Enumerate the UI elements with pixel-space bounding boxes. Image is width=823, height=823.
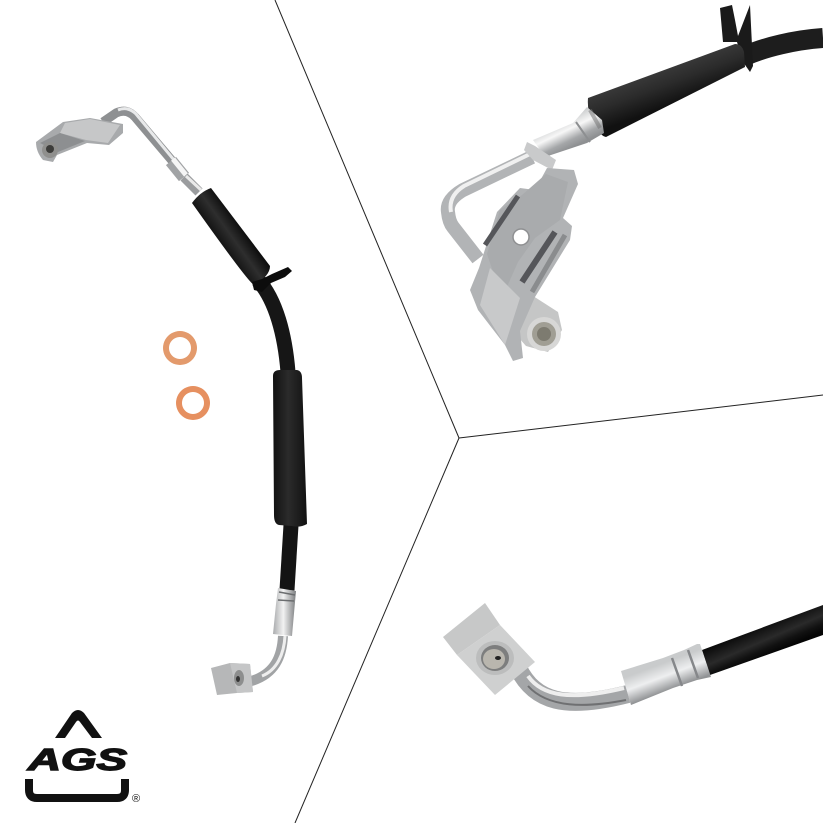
full hose product: [36, 109, 307, 695]
close-up: bottom-right block end: [443, 603, 823, 705]
upper heat sleeve: [192, 188, 270, 285]
divider lines: [275, 0, 823, 823]
close-up: top-right bracket end: [448, 5, 823, 361]
bracket bolt eye: [42, 142, 58, 158]
top metal tube: [103, 109, 174, 163]
bottom ferrule: [273, 588, 296, 636]
curved tube: [518, 668, 628, 705]
bracket hole: [513, 229, 529, 245]
logo wordmark: AGS: [27, 742, 127, 777]
bracket slot right: [522, 232, 555, 282]
copper washer lower: [176, 386, 210, 420]
clamp strap: [524, 142, 556, 170]
threaded port: [512, 294, 562, 352]
rubber hose upper: [258, 280, 288, 372]
logo top chevron: [55, 710, 102, 738]
bent tube: [448, 154, 532, 259]
bottom metal tube: [248, 636, 285, 682]
lower heat sleeve: [273, 370, 307, 527]
hose: [745, 38, 823, 56]
AGS logo: [27, 710, 140, 805]
plastic clip: [720, 5, 753, 72]
crimped ferrule: [533, 107, 604, 157]
heat sleeve: [588, 44, 745, 137]
registered mark: ®: [132, 793, 140, 805]
bracket plate: [470, 168, 578, 361]
block fitting: [443, 603, 535, 695]
hose clip: [252, 267, 292, 292]
copper washer upper: [163, 331, 197, 365]
hose: [702, 605, 823, 675]
bottom block fitting: [211, 663, 253, 695]
logo bottom bracket: [29, 779, 125, 798]
rubber hose lower: [287, 525, 291, 590]
top bracket: [36, 118, 123, 162]
top ferrule: [171, 159, 201, 192]
bracket slot left: [485, 196, 518, 245]
crimped ferrule: [621, 644, 711, 705]
